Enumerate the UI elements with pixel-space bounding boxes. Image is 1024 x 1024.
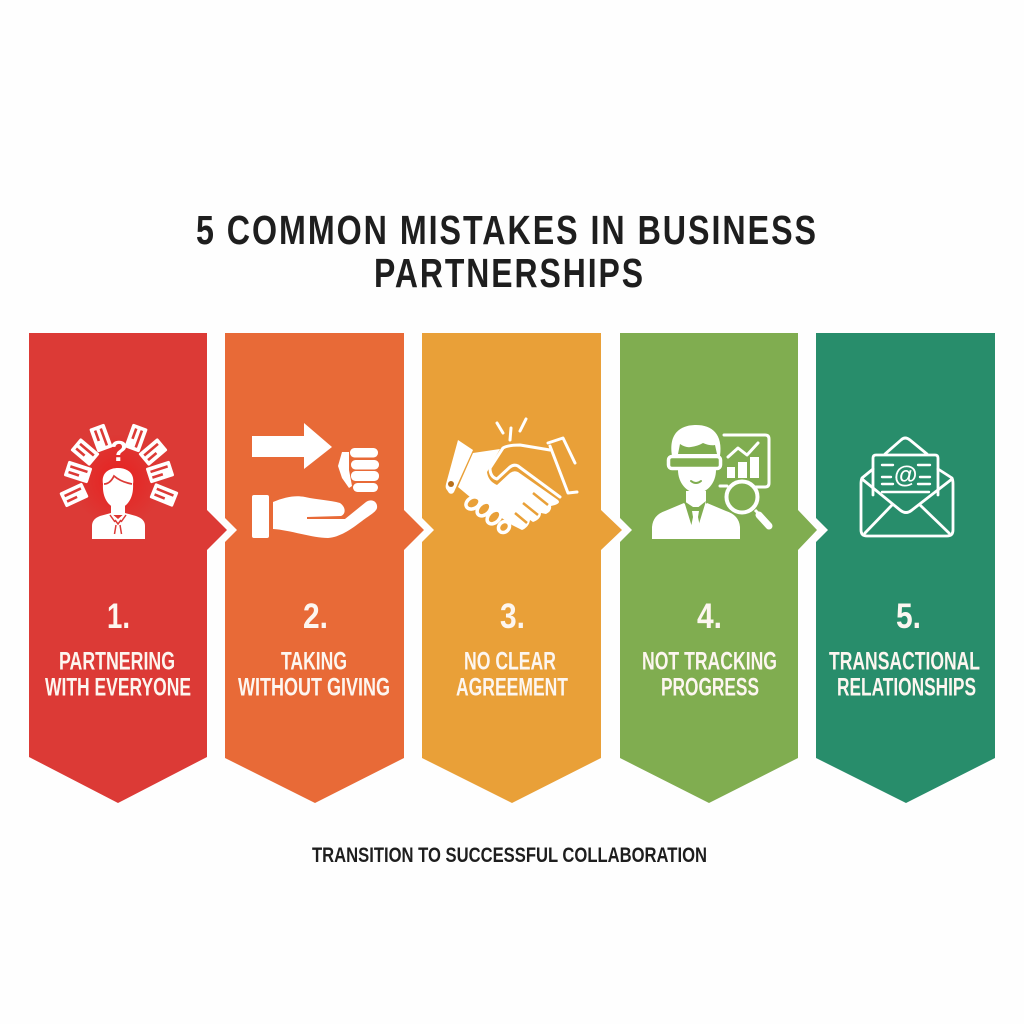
label 2: TAKING <box>281 648 347 676</box>
label 1: PARTNERING <box>59 648 175 676</box>
title: 5 COMMON MISTAKES IN BUSINESS <box>196 207 818 253</box>
label 1 <box>45 648 191 702</box>
icon: open envelope with email letter: @ <box>894 462 917 489</box>
panel 2 shape <box>225 333 424 803</box>
icon: arrow to fist above open hand <box>252 423 379 538</box>
panel 4: not tracking progress <box>620 333 817 803</box>
icon: confused person surrounded by business cards: ? <box>110 436 128 468</box>
label 2 <box>238 648 390 702</box>
panel 5 shape <box>816 333 995 803</box>
number 3: 3. <box>500 597 525 636</box>
panel 3 shape <box>422 333 622 803</box>
number 1: 1. <box>107 597 130 636</box>
label 3: AGREEMENT <box>456 674 568 702</box>
number 5: 5. <box>896 597 921 636</box>
label 1: WITH EVERYONE <box>45 674 191 702</box>
label 3 <box>456 648 568 702</box>
label 4 <box>642 648 777 702</box>
title: PARTNERSHIPS <box>374 250 645 296</box>
number 2: 2. <box>303 597 328 636</box>
panel 3: no clear agreement <box>422 333 622 803</box>
panel 4 shape <box>620 333 817 803</box>
title <box>196 207 818 296</box>
label 4: NOT TRACKING <box>642 648 777 676</box>
footer caption: TRANSITION TO SUCCESSFUL COLLABORATION <box>312 844 707 867</box>
icon: blindfolded man with chart and magnifier <box>652 425 769 539</box>
icon: open envelope with email letter <box>861 438 953 536</box>
panel 1: partnering with everyone <box>29 333 227 803</box>
label 3: NO CLEAR <box>464 648 556 676</box>
label 5 <box>829 648 980 702</box>
panel 1 shape <box>29 333 227 803</box>
number 4: 4. <box>697 597 722 636</box>
icon: handshake <box>446 419 577 535</box>
label 2: WITHOUT GIVING <box>238 674 390 702</box>
panel 5: transactional relationships <box>816 333 995 803</box>
label 4: PROGRESS <box>661 674 759 702</box>
panel 2: taking without giving <box>225 333 424 803</box>
icon: confused person surrounded by business cards <box>59 424 179 539</box>
